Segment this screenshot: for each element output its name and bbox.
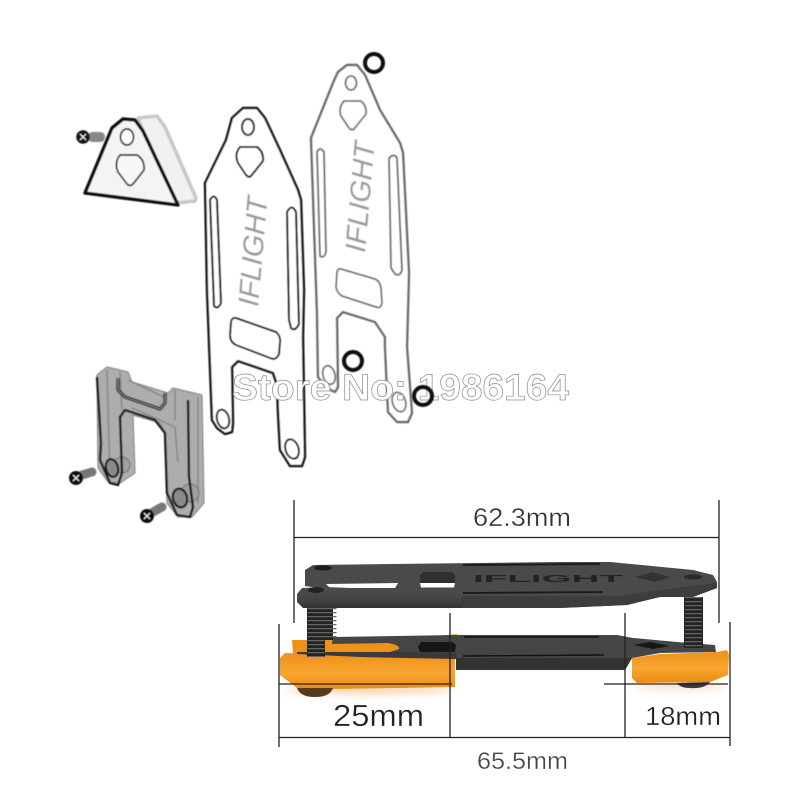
upper front plate edge bbox=[297, 587, 462, 608]
label: IFLIGHT on photo: IFLIGHT bbox=[473, 574, 623, 585]
icon: screw bbox=[140, 507, 162, 523]
dimension: 25mm: 25mm bbox=[333, 698, 424, 733]
soft table reflection bbox=[285, 688, 455, 692]
upper rear plate bbox=[305, 562, 717, 608]
watermark: Store No: 1986164 bbox=[232, 367, 569, 408]
screws bbox=[323, 608, 333, 640]
label: IFLIGHT rear: IFLIGHT bbox=[340, 138, 382, 254]
dimension: 18mm: 18mm bbox=[645, 701, 721, 731]
label: IFLIGHT front: IFLIGHT bbox=[233, 193, 275, 308]
dimension: 18mm bbox=[604, 613, 728, 737]
dimension: 25mm bbox=[279, 613, 452, 737]
orange base right bbox=[632, 650, 729, 683]
dimension: 65.5mm: 65.5mm bbox=[477, 748, 568, 775]
dimension: 62.3mm: 62.3mm bbox=[473, 504, 571, 532]
lower plate bbox=[330, 635, 716, 670]
translucent H bracket with screws bbox=[69, 367, 204, 523]
icon: screw bbox=[76, 130, 105, 144]
orange base left bbox=[280, 653, 455, 689]
rear orange piece bbox=[292, 640, 400, 654]
carbon plate outline, rear bbox=[311, 65, 412, 422]
product photo bbox=[280, 562, 729, 697]
carbon plate outline, front bbox=[205, 108, 305, 466]
icon: black o-rings bbox=[344, 54, 432, 405]
dimension: 62.3mm bbox=[294, 500, 719, 623]
dimension: 65.5mm bbox=[279, 622, 730, 775]
icon: screw bbox=[69, 471, 92, 485]
triangular bracket with screw bbox=[76, 116, 196, 205]
